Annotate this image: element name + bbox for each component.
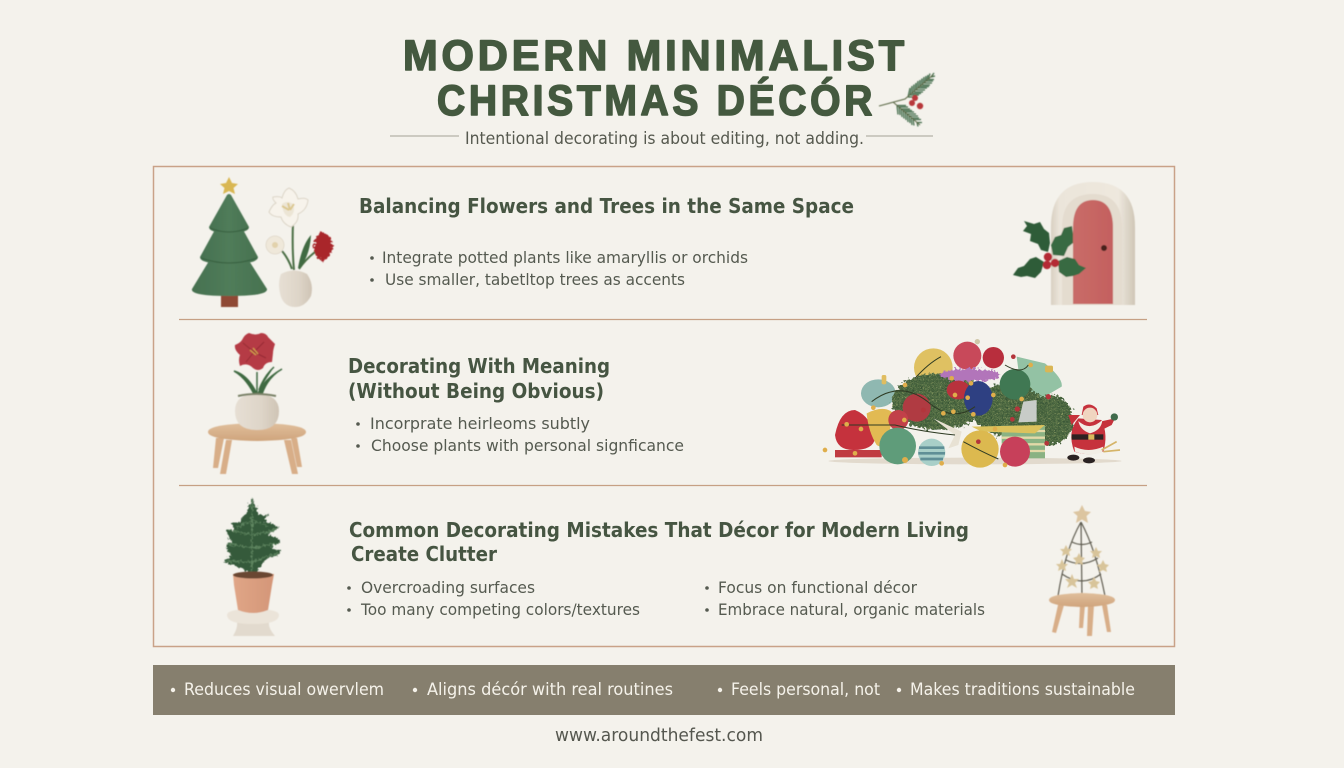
icon: cluttered pile of ornaments and santa xyxy=(823,339,1122,468)
benefits band: Makes traditions sustainable xyxy=(910,680,1135,699)
title: CHRISTMAS DÉCÓR xyxy=(437,76,876,125)
bullet list: balancing flowers and trees xyxy=(370,248,748,289)
icon: white and red flowers in a vase xyxy=(266,188,333,307)
bullet list: clutter mistakes: Overcroading surfaces xyxy=(361,578,535,597)
heading: common decorating mistakes: Create Clutter xyxy=(351,542,497,566)
benefits band: Feels personal, not xyxy=(731,680,880,699)
heading: decorating with meaning: (Without Being Obvious) xyxy=(348,379,604,403)
icon: wire star tree on wooden stool xyxy=(1049,505,1115,636)
bullet list: modern living xyxy=(705,578,985,619)
icon: potted pine tree on pedestal xyxy=(224,498,281,636)
bullet list: clutter mistakes: Too many competing colors/textures xyxy=(360,600,640,619)
bullet list: decorating with meaning: Incorprate heirleoms subtly xyxy=(370,414,590,433)
panel: main frame xyxy=(154,166,1174,646)
heading: decorating with meaning: Decorating With Meaning xyxy=(348,354,610,378)
heading: common decorating mistakes xyxy=(349,518,969,566)
heading: common decorating mistakes: Common Decorating Mistakes That Décor for Modern Living xyxy=(349,518,969,542)
bullet list: decorating with meaning xyxy=(356,414,684,455)
icon: arched red door with holly xyxy=(1013,182,1135,305)
icon: green cone tree with star xyxy=(192,177,267,307)
icon: pine sprig with berries xyxy=(879,73,935,126)
title xyxy=(403,32,908,125)
benefits band xyxy=(153,665,1175,715)
footer website: www.aroundthefest.com xyxy=(555,726,763,746)
bullet list: clutter mistakes xyxy=(347,578,640,619)
icon: amaryllis on wooden table xyxy=(208,333,306,474)
bullet list: modern living: Embrace natural, organic materials xyxy=(718,600,985,619)
bullet list: balancing flowers and trees: Integrate potted plants like amaryllis or orchids xyxy=(382,248,748,267)
bullet list: decorating with meaning: Choose plants with personal signficance xyxy=(371,436,684,455)
subtitle: Intentional decorating is about editing, not adding. xyxy=(465,129,864,149)
title: MODERN MINIMALIST xyxy=(403,32,908,80)
heading: balancing flowers and trees: Balancing Flowers and Trees in the Same Space xyxy=(359,194,854,218)
bullet list: balancing flowers and trees: Use smaller, tabetltop trees as accents xyxy=(385,270,685,289)
benefits band: Reduces visual owervlem xyxy=(184,680,384,699)
bullet list: modern living: Focus on functional décor xyxy=(718,578,917,597)
heading: decorating with meaning xyxy=(348,354,610,403)
benefits band: Aligns décór with real routines xyxy=(427,680,673,699)
